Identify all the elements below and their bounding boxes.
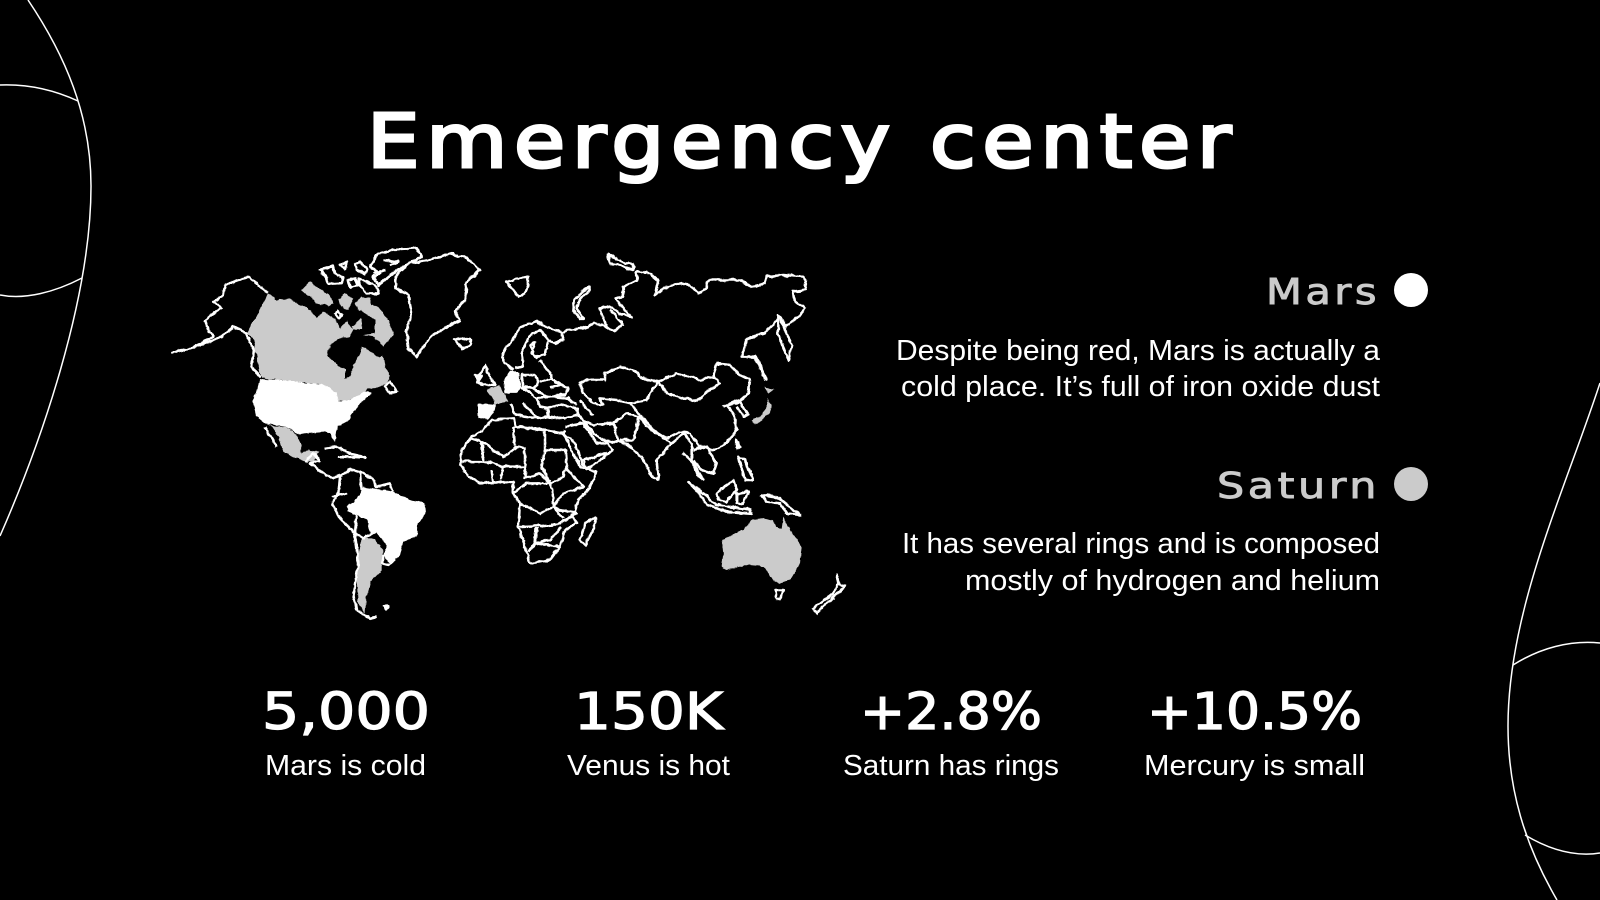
Americas outlines <box>172 277 395 618</box>
Saturn description: It has several rings and is composed <box>902 528 1380 560</box>
stat: 5,000 Mars is cold <box>262 683 430 782</box>
Mars label: Mars <box>1266 272 1380 313</box>
Mars description: cold place. It’s full of iron oxide dust <box>901 371 1380 403</box>
Europe outlines <box>475 322 593 418</box>
decorative curves: right <box>1507 382 1600 900</box>
legend: Mars <box>896 272 1428 403</box>
Argentina <box>357 538 383 613</box>
Germany <box>503 370 522 393</box>
Mars description: Despite being red, Mars is actually a <box>896 335 1381 367</box>
legend: Saturn <box>902 466 1428 597</box>
stat: 150K Venus is hot: Venus is hot <box>567 750 730 782</box>
stat: 5,000 Mars is cold: 5,000 <box>262 683 430 742</box>
Eurasia and Africa outlines <box>460 255 845 613</box>
title: Emergency center <box>367 99 1238 185</box>
map: Europe <box>475 322 593 419</box>
map: Asia, Africa, Oceania <box>460 255 845 613</box>
Spain <box>477 403 497 419</box>
stat: +2.8% Saturn has rings: +2.8% <box>860 683 1042 742</box>
Canada <box>247 282 393 402</box>
world map <box>171 246 846 620</box>
map: Americas <box>172 277 426 618</box>
stat: +2.8% Saturn has rings <box>843 683 1059 782</box>
Mars description <box>896 335 1381 403</box>
Japan <box>752 387 774 425</box>
stat: 150K Venus is hot <box>567 683 730 782</box>
Mars dot <box>1394 273 1428 307</box>
stat: +10.5% Mercury is small: +10.5% <box>1147 683 1362 742</box>
Saturn description: mostly of hydrogen and helium <box>965 565 1380 597</box>
stat: +2.8% Saturn has rings: Saturn has rings <box>843 750 1059 782</box>
Saturn label: Saturn <box>1217 466 1380 507</box>
USA <box>253 378 372 443</box>
decorative curves: left <box>0 0 92 536</box>
Mexico <box>265 423 318 462</box>
Arctic and Greenland outlines <box>319 248 480 393</box>
stat: +10.5% Mercury is small: Mercury is small <box>1144 750 1365 782</box>
Australia <box>722 517 802 583</box>
France <box>487 385 508 405</box>
stat: +10.5% Mercury is small <box>1144 683 1365 782</box>
stat: 150K Venus is hot: 150K <box>574 683 725 742</box>
Saturn description <box>902 528 1380 597</box>
map: Canada and Greenland <box>247 248 480 402</box>
Brazil <box>347 487 426 563</box>
Saturn dot <box>1394 467 1428 501</box>
stat: 5,000 Mars is cold: Mars is cold <box>265 750 426 782</box>
